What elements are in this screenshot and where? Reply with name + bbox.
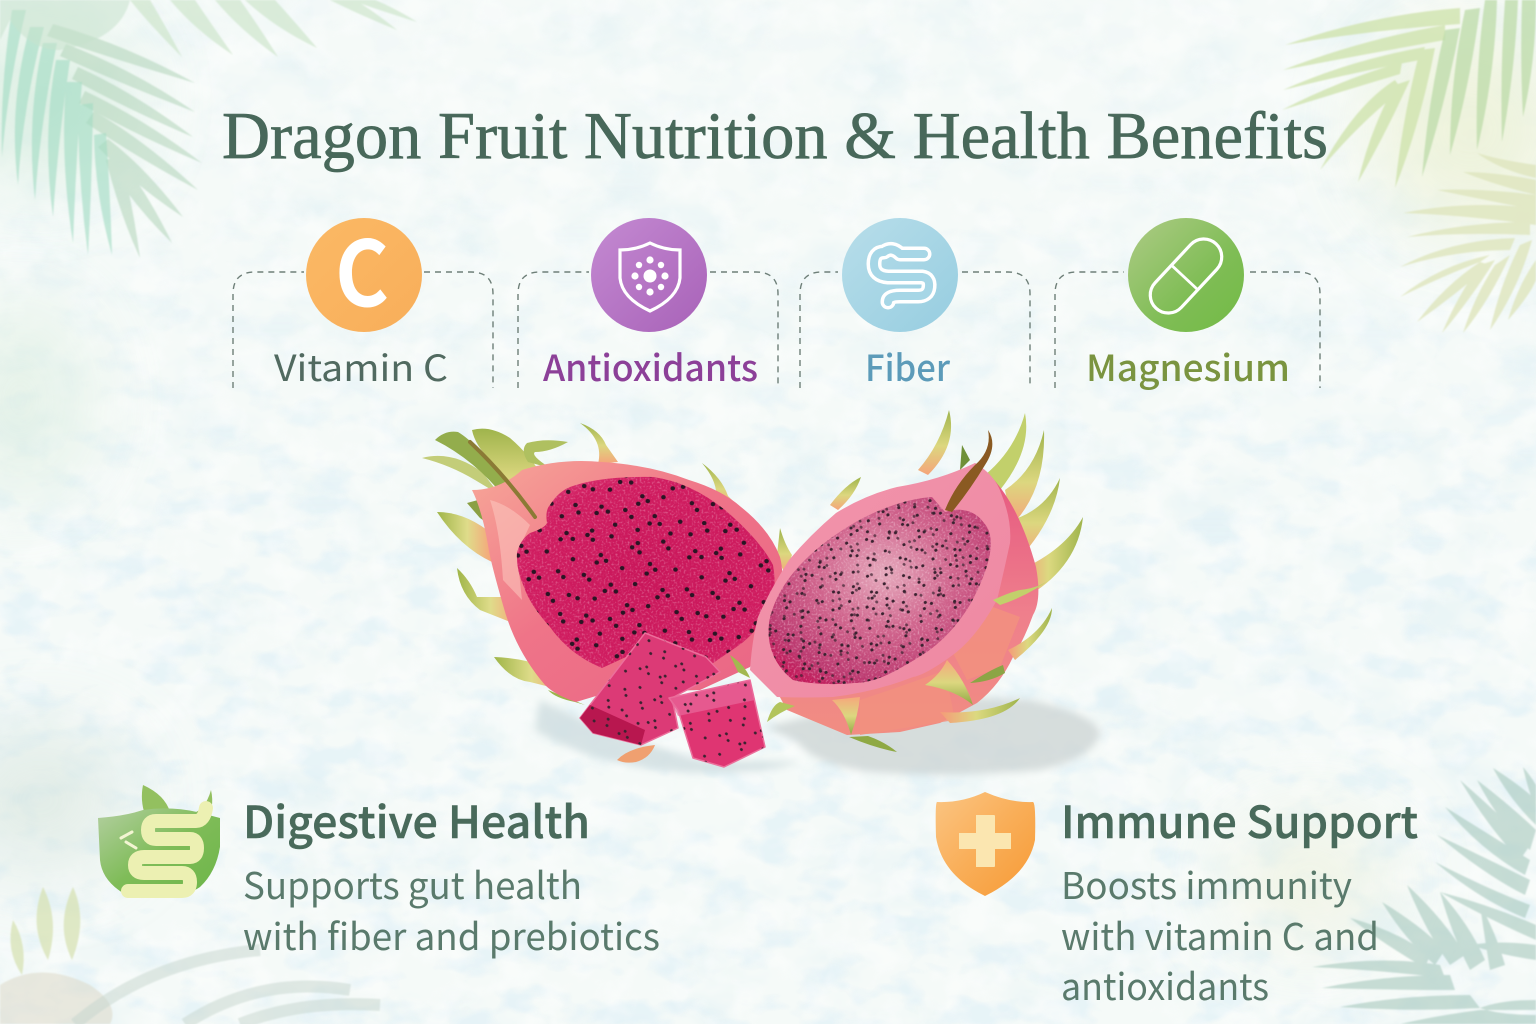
right rim <box>750 463 1010 698</box>
nutrient card: Antioxidants <box>518 218 778 392</box>
icon: vitamin C circle: C <box>335 202 389 332</box>
label: Vitamin C: Vitamin C <box>274 340 448 392</box>
cube front <box>669 680 765 767</box>
heading: Immune Support: Immune Support <box>1061 787 1418 851</box>
left spikes and leaves <box>422 423 792 705</box>
description: digestive: with fiber and prebiotics <box>243 907 660 961</box>
label: Fiber: Fiber <box>865 340 950 392</box>
benefit: digestive health <box>98 785 660 961</box>
ground shadows <box>535 698 1100 775</box>
illustration: dragon fruit <box>422 410 1100 775</box>
right fruit half <box>730 410 1083 752</box>
description: digestive <box>243 856 660 961</box>
nutrient card: Magnesium <box>1055 218 1320 392</box>
right lower spikes <box>730 577 1053 752</box>
palm fronds: top left <box>0 0 417 258</box>
benefit: immune support <box>936 787 1418 1011</box>
left stem <box>470 442 535 517</box>
label: Magnesium: Magnesium <box>1086 340 1290 392</box>
icon: immune shield <box>936 792 1035 896</box>
description: immune: with vitamin C and <box>1061 907 1379 961</box>
nutrient card: Fiber <box>800 218 1030 392</box>
palm fronds: bottom right <box>1312 767 1536 1024</box>
icon: magnesium capsule circle <box>1128 218 1244 332</box>
left flesh <box>516 476 775 668</box>
right stem <box>945 430 992 512</box>
nutrient card: Vitamin C <box>233 202 493 392</box>
left fruit half <box>422 423 792 705</box>
icon: vitamin C circle <box>306 202 422 332</box>
heading: Digestive Health: Digestive Health <box>243 787 590 851</box>
description: digestive: Supports gut health <box>243 856 582 910</box>
flesh chip <box>617 745 655 763</box>
label: Antioxidants: Antioxidants <box>543 340 758 392</box>
icon: antioxidant shield circle <box>591 218 707 332</box>
cube back <box>580 633 720 745</box>
icon: digestive shield <box>98 785 220 898</box>
description: immune: Boosts immunity <box>1061 856 1352 910</box>
description: immune: antioxidants <box>1061 957 1269 1011</box>
right flesh <box>768 497 991 684</box>
right body <box>776 463 1038 735</box>
description: immune <box>1061 856 1379 1011</box>
palm fronds: bottom left <box>0 887 380 1024</box>
right pale scale panel <box>860 607 1020 735</box>
right top spikes <box>830 410 1083 595</box>
title: Dragon Fruit Nutrition & Health Benefits <box>222 99 1328 173</box>
palm fronds: top right <box>1282 0 1536 333</box>
fruit cubes <box>580 633 765 767</box>
left skin inner flap <box>490 500 530 600</box>
left skin <box>472 461 782 702</box>
icon: fiber intestine circle <box>842 218 958 332</box>
